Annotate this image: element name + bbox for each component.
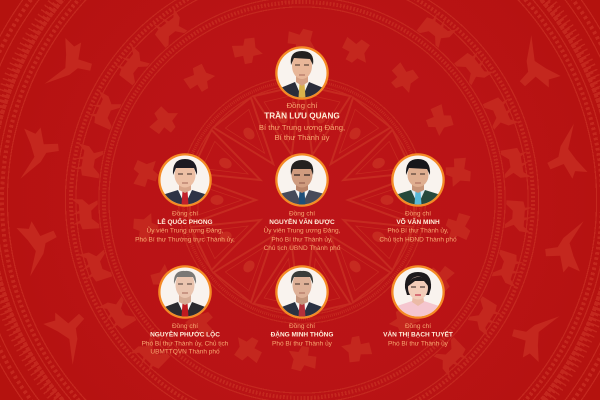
caption: Trần Lưu Quang: Bí thư Thành ủy bbox=[274, 133, 330, 142]
caption: Võ Văn Minh: VÕ VĂN MINH bbox=[396, 217, 440, 226]
portrait: Nguyễn Văn Được bbox=[275, 153, 329, 207]
portrait: Võ Văn Minh bbox=[391, 153, 445, 207]
portrait: Trần Lưu Quang bbox=[275, 46, 329, 100]
leader: Trần Lưu Quang bbox=[259, 46, 345, 142]
caption: Nguyễn Văn Được: Chủ tịch UBND Thành phố bbox=[264, 243, 341, 252]
caption: Lê Quốc Phong: Đồng chí bbox=[172, 208, 198, 218]
caption: Trần Lưu Quang: Đồng chí bbox=[287, 101, 318, 110]
caption: Võ Văn Minh bbox=[379, 208, 457, 244]
caption: Nguyễn Văn Được: Ủy viên Trung ương Đảng, bbox=[264, 226, 341, 234]
caption: Đặng Minh Thông: ĐẶNG MINH THÔNG bbox=[271, 330, 333, 338]
member: Văn Thị Bạch Tuyết bbox=[383, 265, 453, 348]
caption: Văn Thị Bạch Tuyết bbox=[383, 321, 453, 348]
caption: Lê Quốc Phong: Ủy viên Trung ương Đảng, bbox=[147, 226, 224, 234]
caption: Đặng Minh Thông: Đồng chí bbox=[289, 321, 315, 330]
caption: Nguyễn Văn Được: Đồng chí bbox=[289, 208, 315, 218]
portrait: Lê Quốc Phong bbox=[158, 153, 212, 207]
portrait: Nguyễn Phước Lộc bbox=[158, 265, 212, 319]
caption: Võ Văn Minh: Đồng chí bbox=[405, 208, 431, 218]
member: Nguyễn Văn Được bbox=[264, 153, 341, 252]
caption: Nguyễn Văn Được: NGUYỄN VĂN ĐƯỢC bbox=[269, 217, 335, 226]
caption: Đặng Minh Thông bbox=[271, 321, 333, 348]
caption: Trần Lưu Quang bbox=[259, 101, 345, 142]
member: Nguyễn Phước Lộc bbox=[142, 265, 229, 356]
portrait: Văn Thị Bạch Tuyết bbox=[391, 265, 445, 319]
caption: Nguyễn Phước Lộc bbox=[142, 321, 229, 356]
caption: Nguyễn Phước Lộc: UBMTTQVN Thành phố bbox=[150, 346, 220, 356]
caption: Văn Thị Bạch Tuyết: Đồng chí bbox=[405, 321, 431, 330]
caption: Lê Quốc Phong: LÊ QUỐC PHONG bbox=[157, 216, 213, 226]
caption: Nguyễn Phước Lộc: Đồng chí bbox=[172, 321, 198, 330]
member: Võ Văn Minh bbox=[379, 153, 457, 244]
member: Đặng Minh Thông bbox=[271, 265, 333, 348]
caption: Đặng Minh Thông: Phó Bí thư Thành ủy bbox=[272, 340, 333, 348]
portrait: Đặng Minh Thông bbox=[275, 265, 329, 319]
caption: Trần Lưu Quang: Bí thư Trung ương Đảng, bbox=[259, 123, 345, 132]
caption: Văn Thị Bạch Tuyết: VĂN THỊ BẠCH TUYẾT bbox=[383, 328, 453, 338]
caption: Võ Văn Minh: Chủ tịch HĐND Thành phố bbox=[379, 234, 457, 244]
member: Lê Quốc Phong bbox=[135, 153, 235, 244]
caption: Võ Văn Minh: Phó Bí thư Thành ủy, bbox=[387, 226, 449, 234]
caption: Trần Lưu Quang: TRẦN LƯU QUANG bbox=[264, 110, 340, 120]
caption: Nguyễn Văn Được: Phó Bí thư Thành ủy, bbox=[271, 236, 333, 244]
caption: Nguyễn Phước Lộc: Phó Bí thư Thành ủy, Chủ tịch bbox=[142, 340, 229, 348]
caption: Lê Quốc Phong: Phó Bí thư Thường trực Thành ủy, bbox=[135, 236, 235, 244]
caption: Văn Thị Bạch Tuyết: Phó Bí thư Thành ủy bbox=[388, 340, 449, 348]
caption: Nguyễn Văn Được bbox=[264, 208, 341, 252]
caption: Nguyễn Phước Lộc: NGUYỄN PHƯỚC LỘC bbox=[150, 330, 220, 338]
caption: Lê Quốc Phong bbox=[135, 208, 235, 244]
